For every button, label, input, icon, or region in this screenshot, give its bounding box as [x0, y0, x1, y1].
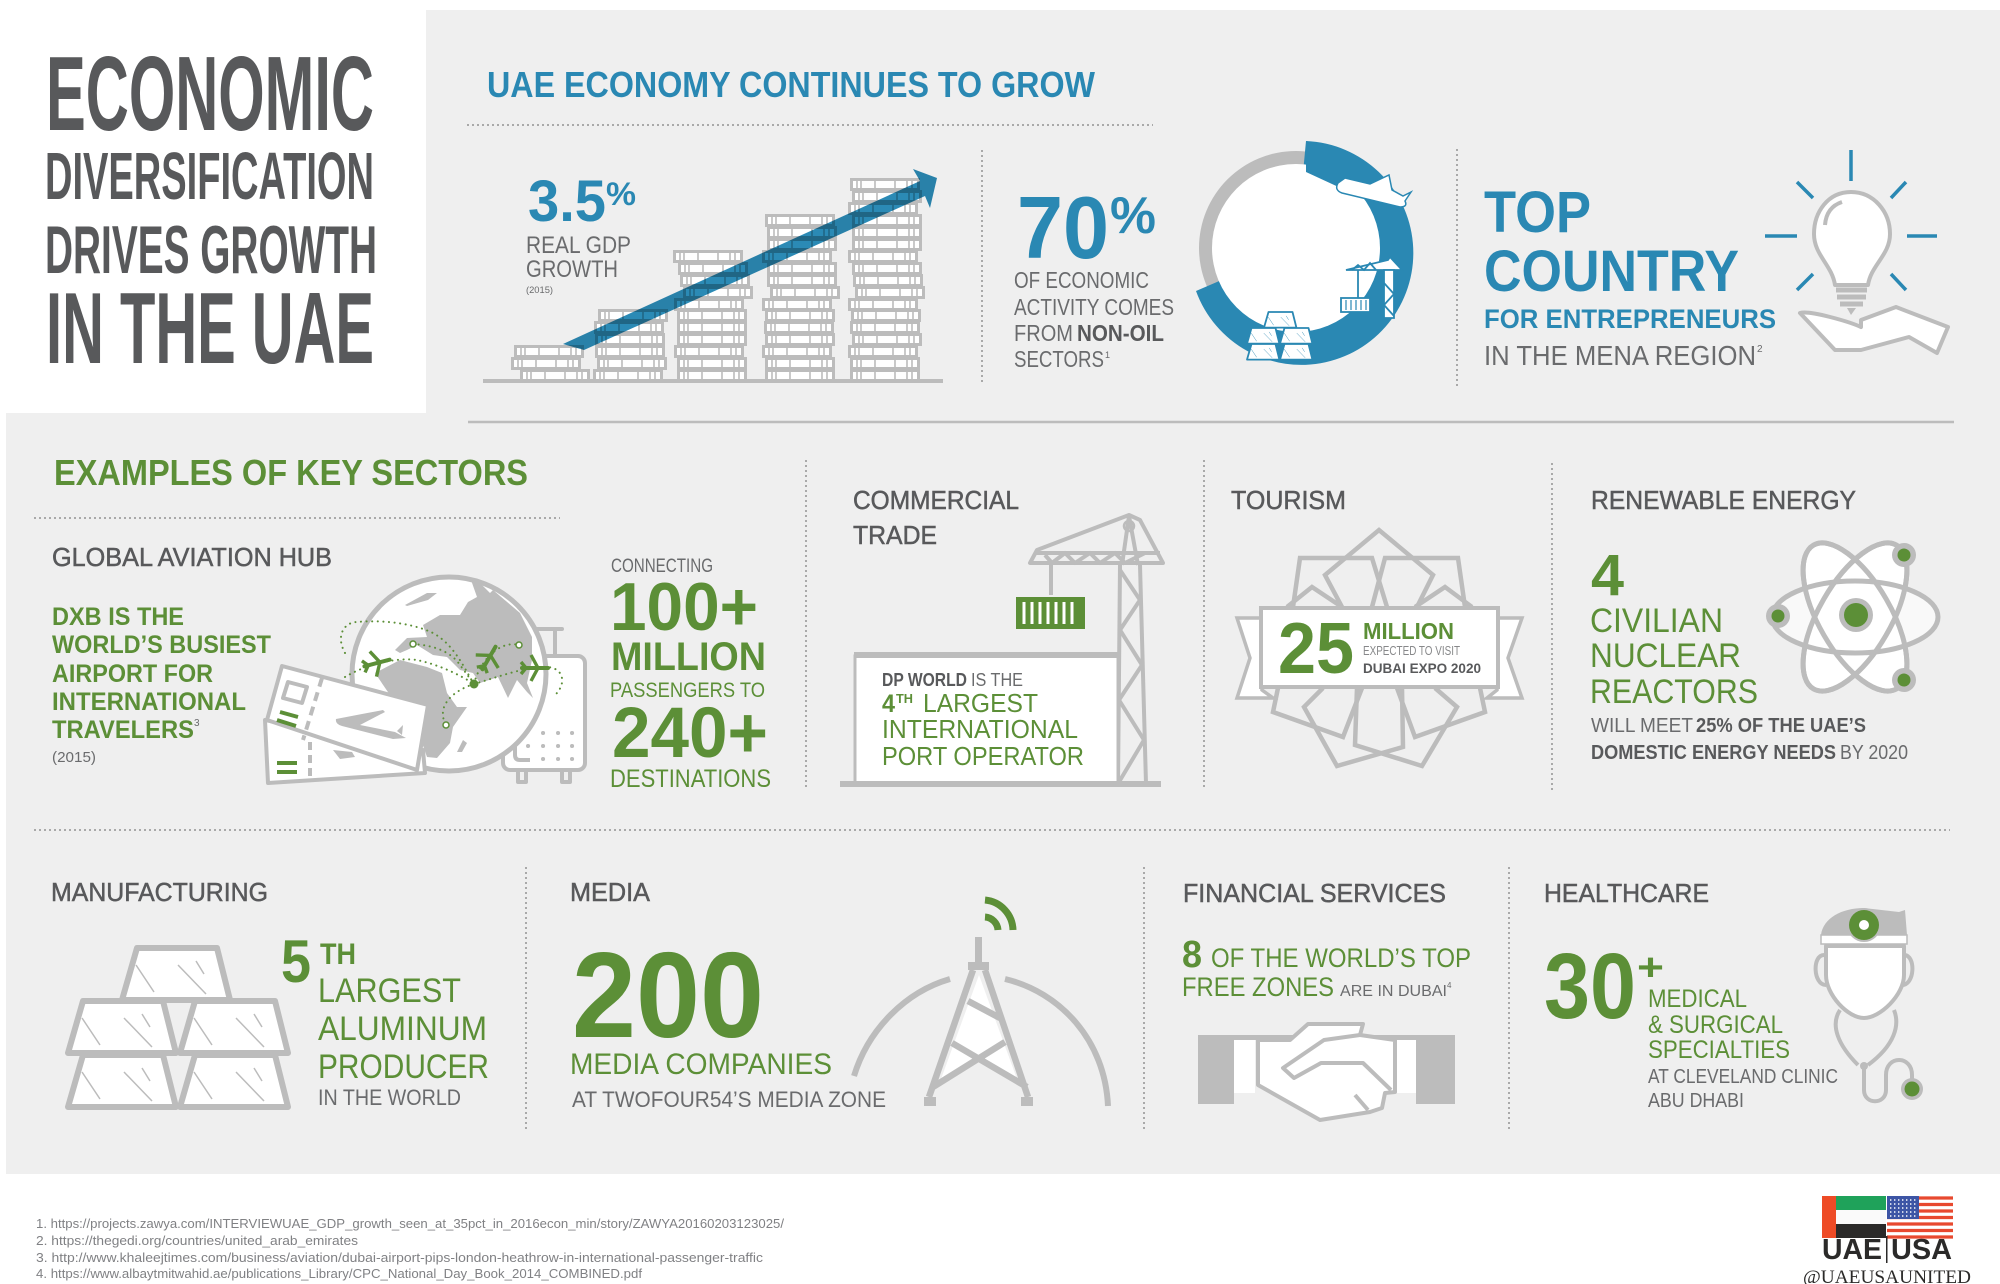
callout: top country: FOR ENTREPRENEURS — [1484, 304, 1776, 334]
footnotes: 4. https://www.albaytmitwahid.ae/publications_Library/CPC_National_Day_Book_2014_COMBINED.pdf — [36, 1267, 643, 1281]
icon: boarding passes — [265, 666, 428, 783]
panel: healthcare: + — [1637, 947, 1664, 989]
panel: media: MEDIA COMPANIES — [570, 1048, 832, 1081]
panel: healthcare: HEALTHCARE — [1544, 878, 1709, 908]
logo: UAE USA United — [1803, 1196, 1971, 1284]
icon: atom — [1766, 527, 1938, 707]
callout box: DP World: LARGEST — [923, 688, 1038, 718]
callout box: DP World: PORT OPERATOR — [882, 741, 1084, 771]
panel: healthcare: & SURGICAL — [1648, 1011, 1783, 1039]
panel: lower background — [6, 413, 2000, 1174]
panel: tourism: TOURISM — [1231, 485, 1346, 515]
heading: key sectors: EXAMPLES OF KEY SECTORS — [54, 452, 528, 493]
panel: manufacturing — [51, 877, 489, 1110]
panel: global aviation hub: CONNECTING — [611, 556, 713, 577]
panel: manufacturing: IN THE WORLD — [318, 1085, 461, 1110]
stat: real GDP growth: GROWTH — [526, 256, 618, 283]
panel: healthcare: MEDICAL — [1648, 985, 1747, 1013]
panel: commercial trade: COMMERCIAL — [853, 485, 1019, 515]
panel: renewable energy — [1590, 485, 1938, 764]
panel: manufacturing: TH — [320, 938, 356, 971]
icon: crane — [1341, 257, 1402, 318]
panel: media: MEDIA — [570, 877, 651, 907]
stat: 70 percent — [1014, 178, 1174, 372]
panel: commercial trade: TRADE — [853, 520, 937, 550]
title — [45, 35, 377, 385]
stat: 70 percent: % — [1110, 187, 1156, 245]
panel: global aviation hub: WORLD’S BUSIEST — [52, 631, 271, 659]
stat: 70 percent: FROM — [1014, 320, 1073, 346]
stat: 70 percent: SECTORS — [1014, 346, 1104, 372]
icon: container — [1016, 597, 1085, 629]
icon: ingots — [1247, 312, 1312, 360]
panel: manufacturing: 5 — [281, 928, 311, 995]
panel: manufacturing: PRODUCER — [318, 1048, 489, 1086]
stat: real GDP growth — [526, 169, 636, 295]
icon: luggage — [503, 629, 585, 782]
callout box: DP World: INTERNATIONAL — [882, 714, 1078, 744]
stat: real GDP growth: 3.5 — [528, 169, 606, 234]
panel: financial services: OF THE WORLD’S TOP — [1211, 943, 1471, 973]
stat: real GDP growth: (2015) — [526, 285, 553, 295]
panel: financial services: 8 — [1182, 934, 1202, 976]
icon: crane — [1030, 515, 1163, 784]
panel: global aviation hub — [52, 542, 771, 793]
panel: renewable energy: 4 — [1591, 543, 1624, 608]
title: ECONOMIC — [46, 35, 374, 153]
footnotes: 2. https://thegedi.org/countries/united_arab_emirates — [36, 1234, 358, 1248]
icon: aluminum ingots — [68, 948, 288, 1107]
callout box: DP World — [840, 655, 1161, 784]
icon: star pattern and banner: MILLION — [1363, 618, 1454, 644]
chart: coin stacks — [483, 179, 943, 381]
callout: top country: COUNTRY — [1484, 239, 1739, 304]
footnotes: 3. http://www.khaleejtimes.com/business/aviation/dubai-airport-pips-london-heathrow-in-international-passenger-traffic — [36, 1251, 763, 1265]
panel: global aviation hub: (2015) — [52, 749, 96, 766]
arrow: growth — [563, 169, 937, 350]
title: DRIVES GROWTH — [45, 212, 377, 288]
donut chart: non-oil share — [1196, 141, 1413, 365]
panel: manufacturing: ALUMINUM — [318, 1010, 487, 1048]
panel: financial services: FINANCIAL SERVICES — [1183, 878, 1446, 908]
icon: star pattern and banner — [1237, 530, 1522, 766]
stat: 70 percent: ACTIVITY COMES — [1014, 294, 1174, 320]
callout box: DP World: 4 — [882, 690, 895, 718]
panel: commercial trade — [840, 485, 1163, 784]
stat: 70 percent: OF ECONOMIC — [1014, 267, 1149, 293]
panel: renewable energy: DOMESTIC ENERGY NEEDS — [1591, 742, 1836, 764]
footnotes: 1. https://projects.zawya.com/INTERVIEWUAE_GDP_growth_seen_at_35pct_in_2016econ_min/story/ZAWYA20160203123025/ — [36, 1217, 785, 1231]
icon: broadcast tower — [854, 900, 1108, 1106]
panel: renewable energy: RENEWABLE ENERGY — [1591, 485, 1856, 515]
panel: manufacturing: MANUFACTURING — [51, 877, 268, 907]
panel: global aviation hub: INTERNATIONAL — [52, 688, 246, 716]
stat: real GDP growth: REAL GDP — [526, 232, 631, 259]
stat: 70 percent: 1 — [1105, 350, 1110, 360]
icon: light bulb in hand — [1765, 150, 1948, 353]
panel: global aviation hub: GLOBAL AVIATION HUB — [52, 542, 332, 572]
callout box: DP World: DP WORLD — [882, 670, 967, 690]
panel: renewable energy: WILL MEET — [1591, 715, 1693, 737]
stat: 70 percent: NON-OIL — [1077, 320, 1164, 346]
panel: renewable energy: CIVILIAN — [1590, 602, 1723, 640]
icon: handshake — [1198, 1024, 1455, 1120]
panel: healthcare: 30 — [1544, 934, 1636, 1038]
panel: global aviation hub: 3 — [194, 718, 200, 729]
callout: top country: TOP — [1484, 180, 1591, 245]
panel: healthcare — [1544, 878, 1923, 1112]
panel: global aviation hub: PASSENGERS TO — [610, 679, 765, 702]
icon: plane — [1337, 175, 1411, 207]
panel: renewable energy: NUCLEAR — [1590, 637, 1741, 675]
panel: tourism — [1231, 485, 1522, 766]
icon: star pattern and banner: DUBAI EXPO 2020 — [1363, 660, 1481, 676]
panel: renewable energy: BY 2020 — [1840, 742, 1908, 764]
icon: star pattern and banner: 25 — [1278, 609, 1354, 689]
panel: healthcare: ABU DHABI — [1648, 1090, 1744, 1112]
panel: global aviation hub: MILLION — [611, 635, 766, 679]
panel: manufacturing: LARGEST — [318, 972, 461, 1010]
callout box: DP World: TH — [896, 691, 913, 706]
panel: financial services: 4 — [1447, 981, 1452, 990]
icon: doctor with stethoscope — [1816, 908, 1923, 1101]
panel: healthcare: SPECIALTIES — [1648, 1036, 1790, 1064]
panel: global aviation hub: DXB IS THE — [52, 603, 184, 631]
logo: UAE USA United: USA — [1891, 1234, 1952, 1266]
panel: global aviation hub: AIRPORT FOR — [52, 660, 213, 688]
icon: star pattern and banner: EXPECTED TO VISIT — [1363, 643, 1460, 658]
stat: real GDP growth: % — [606, 176, 636, 212]
panel: media — [570, 877, 1108, 1112]
panel: media: AT TWOFOUR54’S MEDIA ZONE — [572, 1087, 886, 1112]
stat: 70 percent: 70 — [1017, 178, 1109, 277]
callout: top country: 2 — [1757, 344, 1763, 355]
footnotes — [36, 1217, 785, 1281]
panel: healthcare: AT CLEVELAND CLINIC — [1648, 1066, 1838, 1088]
panel: top background — [426, 10, 2000, 420]
panel: global aviation hub: 240+ — [612, 694, 768, 773]
panel: global aviation hub: DESTINATIONS — [610, 765, 771, 793]
panel: renewable energy: 25% OF THE UAE’S — [1696, 715, 1866, 737]
panel: global aviation hub: 100+ — [610, 569, 758, 645]
logo: UAE USA United: UAE — [1822, 1234, 1882, 1266]
panel: global aviation hub: TRAVELERS — [52, 716, 194, 744]
icon: globe — [341, 577, 562, 771]
title: DIVERSIFICATION — [45, 139, 374, 214]
callout box: DP World: IS THE — [971, 670, 1023, 690]
callout: top country — [1484, 180, 1776, 371]
panel: financial services: ARE IN DUBAI — [1340, 983, 1447, 1000]
callout: top country: IN THE MENA REGION — [1484, 340, 1756, 371]
panel: media: 200 — [572, 927, 764, 1063]
panel: financial services — [1182, 878, 1471, 1120]
heading: UAE economy: UAE ECONOMY CONTINUES TO GROW — [487, 64, 1095, 105]
title: IN THE UAE — [46, 273, 374, 385]
panel: financial services: FREE ZONES — [1182, 972, 1334, 1002]
panel: renewable energy: REACTORS — [1590, 673, 1758, 711]
